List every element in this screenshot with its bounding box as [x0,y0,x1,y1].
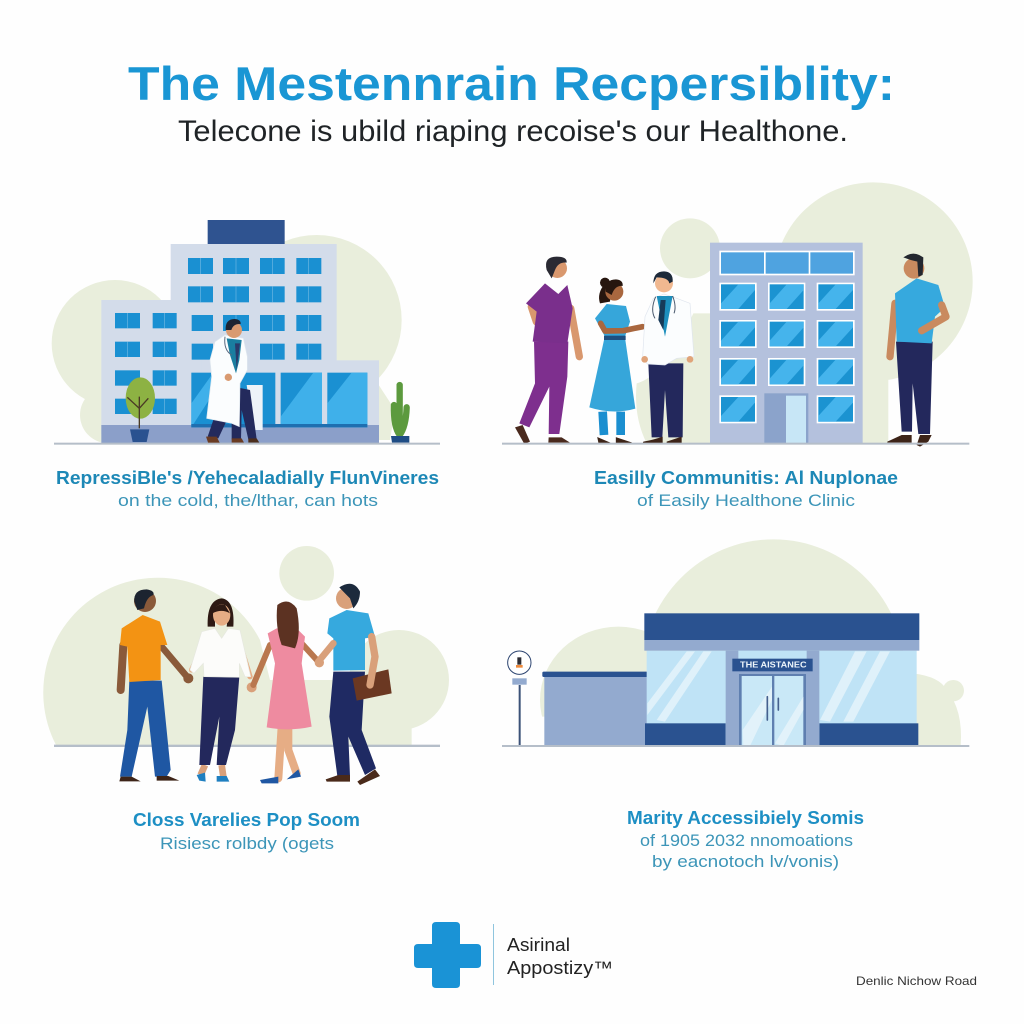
panel 3 heading: Closs Varelies Pop Soom [133,810,360,830]
woman in white top [183,598,257,782]
panel: storefront clinic [502,539,969,871]
doctor with stethoscope [641,271,694,443]
nurse in purple scrubs [515,257,579,444]
illustration: hospital building and doctor [52,220,440,445]
illustration: clinic building and people [502,182,973,447]
panel 1 caption: on the cold, the/lthar, can hots [118,491,378,510]
footer address: Denlic Nichow Road [856,974,977,988]
panel 4 heading: Marity Accessibiely Somis [627,808,864,828]
shop sign [732,659,813,671]
illustration: group of people [43,546,449,785]
panel 4 caption line 2: by eacnotoch lv/vonis) [652,852,839,871]
double doors [739,674,806,746]
woman in blue dress [589,278,643,443]
man in blue t-shirt [887,254,946,447]
icon: medical cross [414,922,481,988]
sign post [508,651,531,746]
man in blue shirt with folder [318,584,392,785]
shop sign: THE AISTANEC [740,660,807,670]
doctor figure [206,319,263,443]
potted cactus [391,385,409,443]
clinic building [710,243,863,443]
panel: hospital with doctor [52,220,440,510]
illustration: storefront building [502,540,970,747]
panel: four people holding hands [43,546,449,853]
footer logo [414,922,613,988]
panel 2 caption: of Easily Healthone Clinic [637,491,856,510]
logo name line 2: Appostizy™ [507,958,613,978]
panel 1 heading: RepressiBle's /Yehecaladially FlunVineres [56,468,439,488]
title: The Mestennrain Recpersiblity: [128,57,895,110]
woman in pink dress [253,602,324,783]
panel 3 caption: Risiesc rolbdy (ogets [160,834,334,853]
logo name line 1: Asirinal [507,935,570,955]
man in orange shirt [119,589,188,781]
panel 4 caption line 1: of 1905 2032 nnomoations [640,831,853,850]
panel 2 heading: Easilly Communitis: Al Nuplonae [594,468,898,488]
panel: clinic with staff and patient [502,182,973,510]
potted tree [126,377,155,442]
subtitle: Telecone is ubild riaping recoise's our Healthone. [178,115,848,148]
